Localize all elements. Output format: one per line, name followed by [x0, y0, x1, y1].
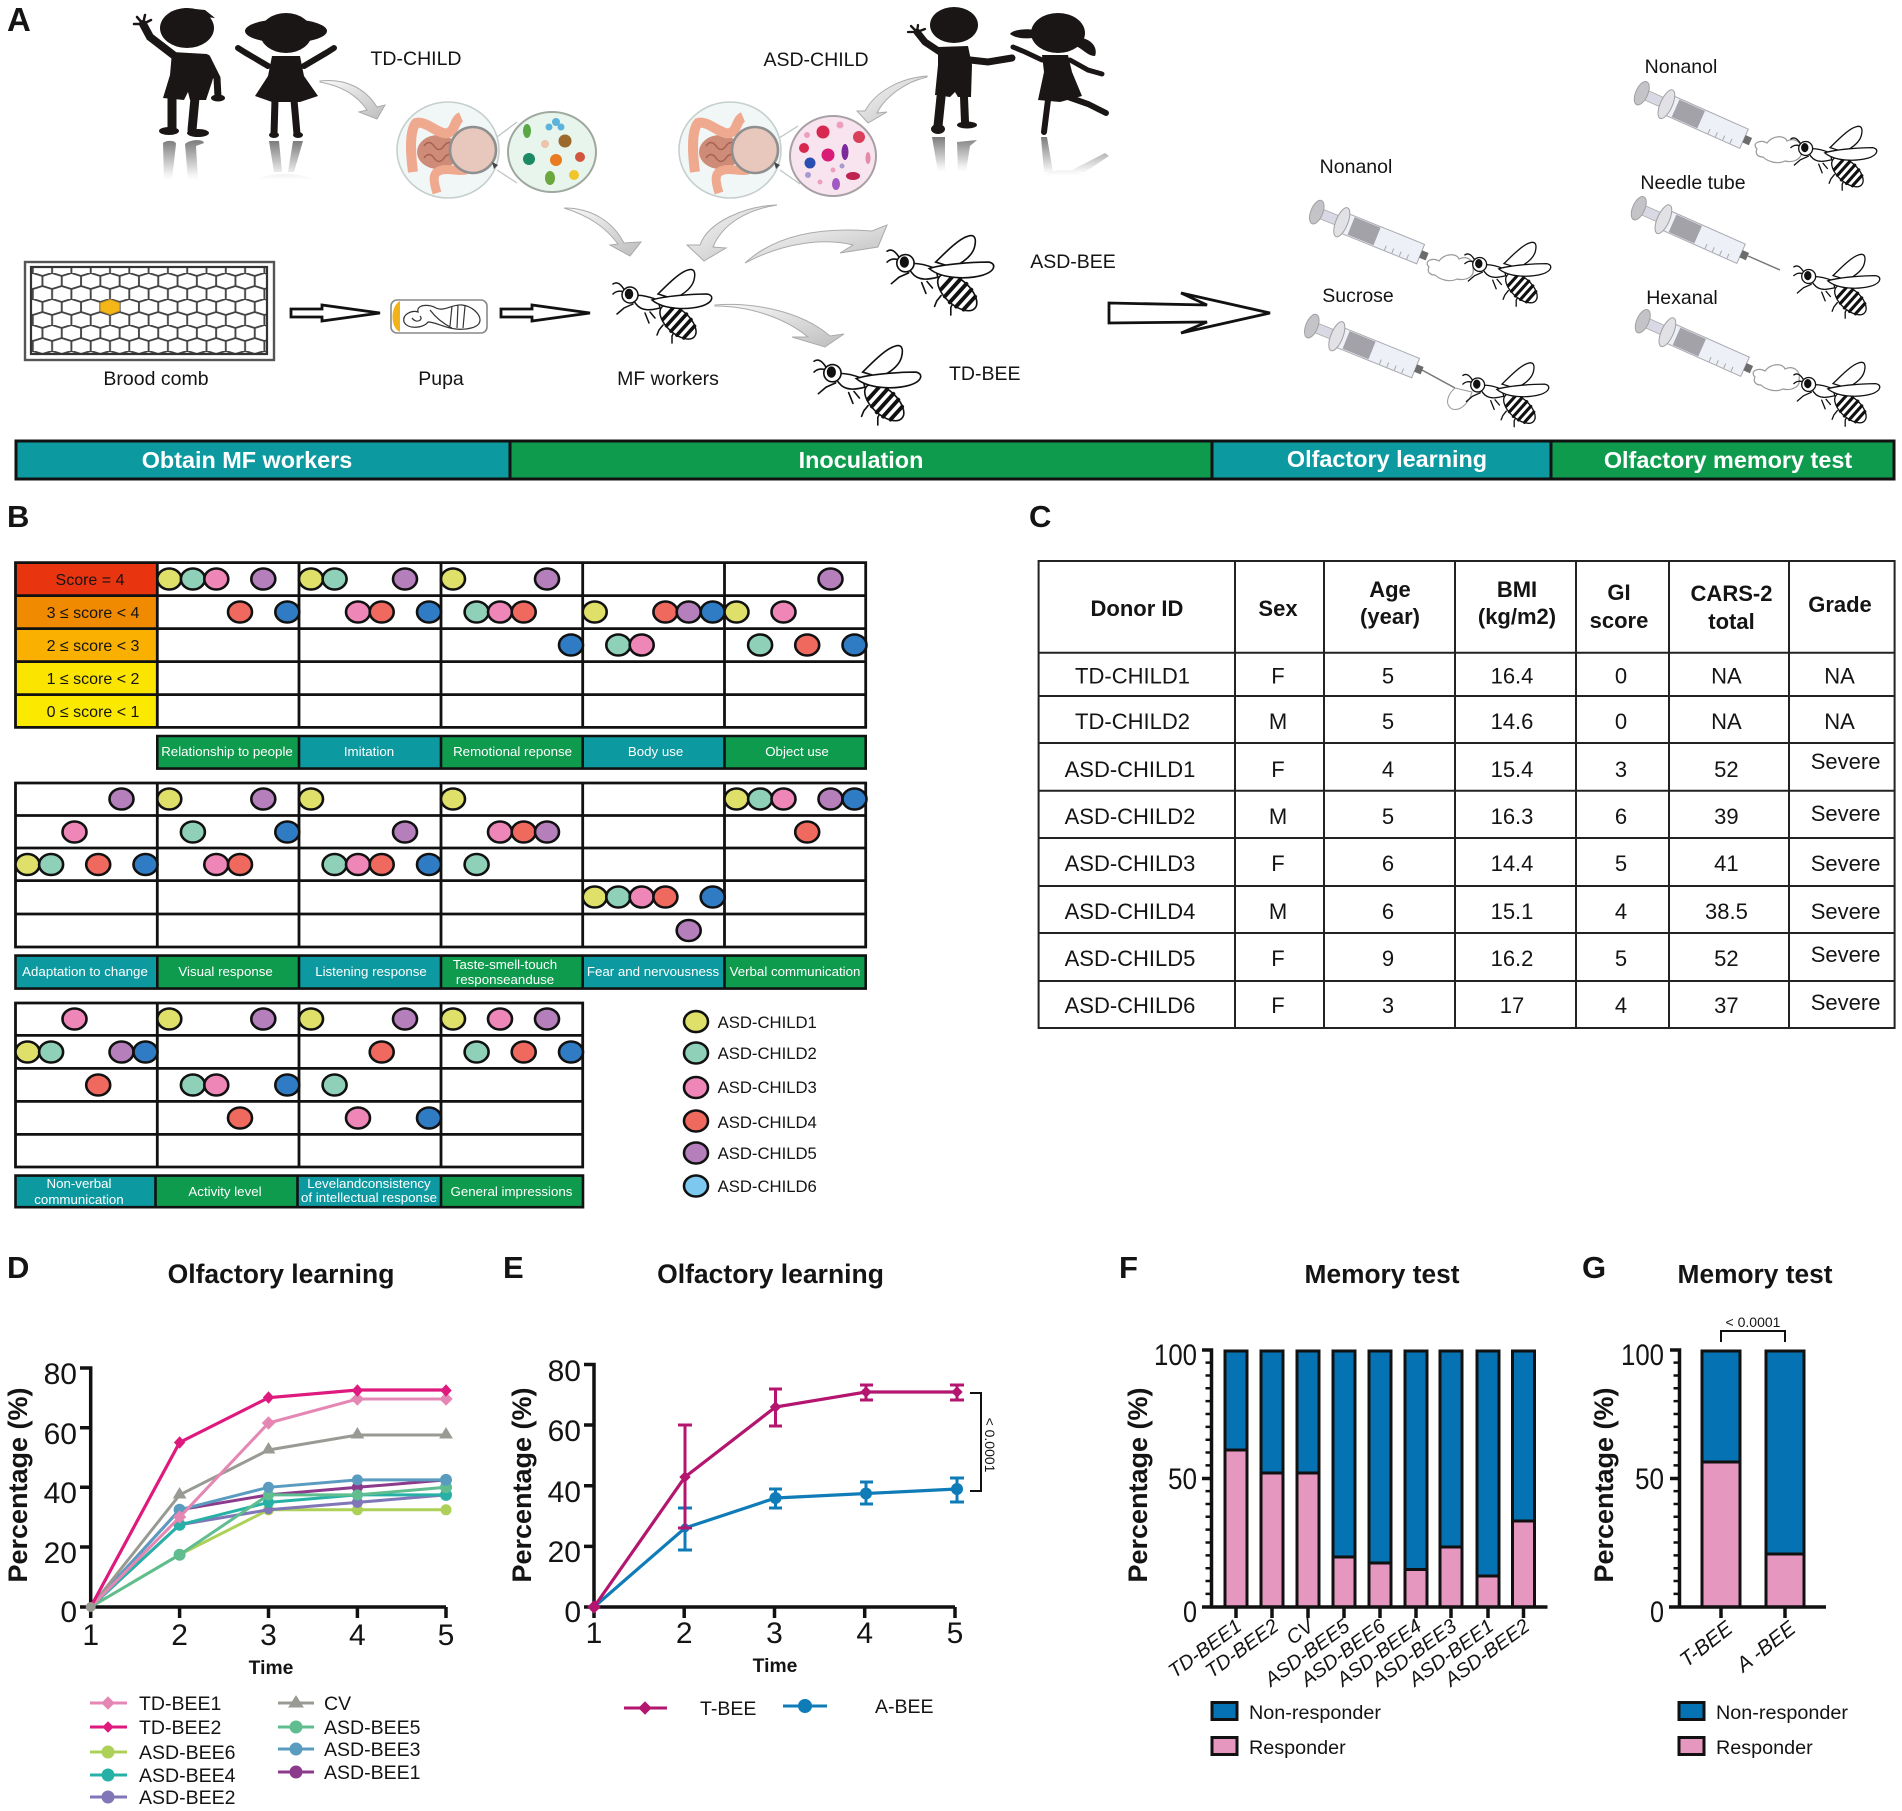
table header: BMI [1497, 577, 1537, 602]
grid 3 lines [16, 1003, 583, 1167]
grid 3 category labels: Levelandconsistency [307, 1176, 431, 1191]
table row ASD-CHILD3: 6 [1382, 851, 1394, 876]
syringe and bee: Nonanol test [1630, 77, 1877, 192]
arrow: inoculation to learning [1109, 293, 1270, 333]
series TD-BEE1 [91, 1393, 452, 1607]
table row ASD-CHILD1: Severe [1811, 749, 1880, 774]
grid 2 category labels: Verbal communication [730, 964, 860, 979]
legend: ASD-BEE6 [139, 1742, 235, 1764]
y tick labels [1621, 1339, 1664, 1629]
series ASD-BEE2 [91, 1490, 451, 1607]
legend [90, 1693, 421, 1809]
table row TD-CHILD1: NA [1824, 664, 1855, 688]
donor legend: ASD-CHILD4 [718, 1113, 817, 1132]
legend: ASD-BEE2 [139, 1787, 235, 1809]
table row ASD-CHILD4: 4 [1615, 899, 1627, 924]
panel letter F: F [1119, 1250, 1138, 1285]
axis tick labels: 4 [856, 1617, 873, 1650]
panel B: CARS score matrix [7, 499, 866, 1207]
donor legend: ASD-CHILD2 [718, 1044, 817, 1063]
legend: ASD-BEE4 [139, 1765, 236, 1787]
stage bar: Inoculation [799, 447, 923, 473]
grid 1 category labels: Object use [765, 744, 829, 759]
grid 2 lines [16, 783, 866, 947]
table row ASD-CHILD5: 9 [1382, 946, 1394, 971]
series ASD-BEE1 [91, 1480, 446, 1607]
grid 1 donor dots [157, 568, 867, 656]
table row ASD-CHILD5: F [1271, 946, 1285, 971]
table row TD-CHILD2: NA [1824, 709, 1855, 734]
table header: score [1590, 608, 1648, 633]
table header: (kg/m2) [1478, 604, 1556, 629]
series ASD-BEE5 [91, 1482, 451, 1607]
arrow: comb to pupa [291, 305, 380, 321]
donor legend: ASD-CHILD6 [718, 1177, 817, 1196]
table row TD-CHILD2: M [1269, 709, 1287, 734]
icon: TD girl silhouette [238, 13, 334, 180]
panel letter C: C [1029, 499, 1051, 534]
axis tick labels: 60 [548, 1415, 581, 1448]
grid 1 lines [16, 563, 866, 727]
grid 3 category labels: Non-verbal [46, 1176, 112, 1191]
legend [624, 1696, 934, 1720]
axis tick labels: 80 [548, 1355, 581, 1388]
table row ASD-CHILD1: 4 [1382, 757, 1394, 782]
panel letter E: E [503, 1250, 524, 1285]
axes and ticks [584, 1364, 955, 1618]
icon: TD bee [814, 346, 921, 427]
significance bracket: < 0.0001 [1726, 1314, 1781, 1330]
table row ASD-CHILD4 [1065, 899, 1880, 924]
origin marker [86, 1602, 96, 1612]
panel F: memory test stacked bars [1119, 1250, 1548, 1759]
axis tick labels: 40 [548, 1476, 581, 1509]
syringe and bee: Nonanol learning [1305, 196, 1551, 308]
table row ASD-CHILD1: 15.4 [1491, 757, 1533, 782]
series TD-BEE2 [91, 1385, 451, 1607]
axis tick labels: 80 [44, 1358, 77, 1391]
stacked bars [1225, 1351, 1534, 1607]
grid 3 donor dots [16, 1008, 583, 1128]
icon: brood comb [25, 262, 274, 360]
x tick labels: TD-BEE2 [1202, 1615, 1283, 1683]
legend: ASD-BEE3 [324, 1739, 420, 1761]
x tick labels: ASD-BEE6 [1296, 1615, 1391, 1692]
connector lines ASD [776, 126, 800, 184]
chart title: Olfactory learning [168, 1259, 394, 1289]
legend: A-BEE [875, 1696, 934, 1718]
table row ASD-CHILD4: Severe [1811, 899, 1880, 924]
label MF workers: MF workers [617, 368, 719, 390]
table row ASD-CHILD1: 52 [1714, 757, 1739, 782]
panel C: donor table [1029, 499, 1895, 1028]
label Brood comb: Brood comb [103, 368, 209, 390]
label ASD-BEE: ASD-BEE [1030, 251, 1116, 273]
icon: MF worker bee [613, 269, 712, 345]
stacked bars [1702, 1351, 1804, 1607]
panel G: pooled memory test [1582, 1250, 1848, 1759]
icon: ASD gut [679, 102, 781, 198]
table row ASD-CHILD4: 15.1 [1491, 899, 1533, 924]
grid 3 category labels: General impressions [451, 1184, 573, 1199]
grid 1 category labels: Body use [628, 744, 683, 759]
legend: TD-BEE2 [139, 1717, 221, 1739]
axes and ticks [1202, 1350, 1548, 1618]
score scale: Score = 4 [56, 572, 125, 589]
table row ASD-CHILD6: ASD-CHILD6 [1065, 993, 1195, 1018]
score scale: 0 ≤ score < 1 [47, 704, 140, 721]
icon: TD microbiota circle [508, 112, 596, 192]
icon: pupa tube [391, 300, 487, 333]
icon: TD gut [397, 102, 499, 198]
table grid [1039, 561, 1895, 1028]
y axis label: Percentage (%) [1123, 1387, 1153, 1583]
significance bracket: < 0.0001 [982, 1418, 998, 1473]
axis tick labels [548, 1355, 963, 1650]
table row ASD-CHILD2: 5 [1382, 804, 1394, 829]
table row ASD-CHILD5: Severe [1811, 942, 1880, 967]
grid 2 category labels: responseanduse [456, 972, 554, 987]
panel letter G: G [1582, 1250, 1606, 1285]
icon: ASD bee [887, 236, 994, 317]
table row TD-CHILD2: TD-CHILD2 [1075, 709, 1190, 734]
stage bar: Olfactory memory test [1604, 447, 1852, 473]
axis tick labels: 0 [60, 1596, 77, 1629]
arrow: ASD microbiota to MF workers [687, 205, 777, 261]
y axis label: Percentage (%) [1589, 1387, 1619, 1583]
donor legend: ASD-CHILD3 [718, 1078, 817, 1097]
panel A: experimental workflow [7, 1, 1894, 479]
table row ASD-CHILD2: 16.3 [1491, 804, 1533, 829]
legend [1679, 1702, 1848, 1759]
table row ASD-CHILD2: M [1269, 804, 1287, 829]
axis tick labels: 1 [82, 1619, 99, 1652]
table row ASD-CHILD4: 6 [1382, 899, 1394, 924]
y axis label: Percentage (%) [3, 1387, 33, 1583]
x axis title: Time [753, 1656, 798, 1677]
label Nonanol memory test: Nonanol [1645, 56, 1717, 78]
table row TD-CHILD2 [1075, 709, 1855, 734]
grid 2 category labels: Fear and nervousness [587, 964, 720, 979]
table row TD-CHILD2: 0 [1615, 709, 1627, 734]
grid 1 category labels: Relationship to people [161, 744, 293, 759]
table row ASD-CHILD6: 3 [1382, 993, 1394, 1018]
x tick labels: ASD-BEE2 [1440, 1615, 1534, 1692]
table row ASD-CHILD6: 17 [1500, 993, 1524, 1018]
axis tick labels: 20 [44, 1537, 77, 1570]
table row TD-CHILD1: 5 [1382, 664, 1394, 688]
grid 1 category labels [157, 736, 866, 769]
legend [1212, 1702, 1381, 1759]
y tick labels: 0 [1183, 1596, 1197, 1629]
stage bar: Obtain MF workers [142, 447, 352, 473]
axis tick labels [44, 1358, 454, 1652]
legend: CV [324, 1693, 351, 1715]
axis tick labels: 60 [44, 1418, 77, 1451]
axis tick labels: 5 [947, 1617, 963, 1650]
label Sucrose: Sucrose [1322, 285, 1394, 307]
table row TD-CHILD2: 5 [1382, 709, 1394, 734]
table row ASD-CHILD2: 6 [1615, 804, 1627, 829]
stage bar: Olfactory learning [1287, 446, 1487, 472]
table row TD-CHILD1: 16.4 [1491, 664, 1533, 688]
table header: total [1708, 609, 1755, 634]
series T-BEE with error bars [588, 1385, 964, 1613]
donor legend: ASD-CHILD5 [718, 1144, 817, 1163]
table row TD-CHILD1: 0 [1615, 664, 1627, 688]
icon: ASD microbiota circle [790, 116, 876, 196]
table row ASD-CHILD3 [1065, 851, 1880, 876]
series ASD-BEE4 [91, 1489, 451, 1607]
axis tick labels: 40 [44, 1477, 77, 1510]
table row ASD-CHILD6: Severe [1811, 990, 1880, 1015]
table row ASD-CHILD2: ASD-CHILD2 [1065, 804, 1195, 829]
syringe and bee: Hexanal test [1631, 305, 1880, 428]
table header: GI [1607, 580, 1631, 605]
grid 3 category labels: Activity level [188, 1184, 262, 1199]
connector lines TD [493, 122, 517, 183]
table header [1091, 577, 1872, 634]
x tick labels: CV [1283, 1614, 1319, 1649]
x tick labels: A -BEE [1731, 1616, 1801, 1678]
label Pupa: Pupa [418, 368, 464, 390]
grid 2 donor dots [16, 788, 866, 941]
chart title: Memory test [1305, 1259, 1460, 1289]
axis tick labels: 3 [260, 1619, 277, 1652]
grid 1 category labels: Remotional reponse [453, 744, 572, 759]
legend: T-BEE [700, 1698, 756, 1720]
table row ASD-CHILD5: 52 [1714, 946, 1739, 971]
grid 2 category labels: Adaptation to change [22, 964, 148, 979]
table row ASD-CHILD5: 5 [1615, 946, 1627, 971]
table row ASD-CHILD6: 4 [1615, 993, 1627, 1018]
label TD-BEE: TD-BEE [949, 363, 1021, 385]
axis tick labels: 2 [171, 1619, 188, 1652]
table header: Grade [1808, 592, 1872, 617]
grid 1 category labels: Imitation [344, 744, 394, 759]
significance bracket [1721, 1314, 1785, 1342]
axis tick labels: 1 [586, 1617, 602, 1650]
legend: Responder [1249, 1737, 1346, 1759]
grid 2 category labels: Taste-smell-touch [453, 957, 557, 972]
table row TD-CHILD1: TD-CHILD1 [1075, 664, 1190, 688]
icon: ASD girl silhouette [1010, 13, 1109, 176]
panel D: olfactory learning line chart [3, 1250, 454, 1809]
table row TD-CHILD1: NA [1711, 664, 1742, 688]
table header: CARS-2 [1691, 581, 1772, 606]
table row ASD-CHILD5 [1065, 942, 1880, 971]
table row ASD-CHILD1: F [1271, 757, 1285, 782]
table row ASD-CHILD5: ASD-CHILD5 [1065, 946, 1195, 971]
donor legend: ASD-CHILD1 [718, 1013, 817, 1032]
x tick labels [1165, 1614, 1534, 1692]
arrow: pupa to MF workers [501, 305, 590, 321]
legend: Non-responder [1716, 1702, 1848, 1724]
score scale [16, 563, 157, 728]
table row ASD-CHILD4: M [1269, 899, 1287, 924]
y tick labels: 50 [1635, 1463, 1664, 1496]
y tick labels: 0 [1650, 1596, 1664, 1629]
x tick labels [1676, 1616, 1801, 1678]
arrow: ASD child to gut [857, 76, 927, 123]
panel E: pooled olfactory learning [503, 1250, 998, 1720]
x axis title: Time [249, 1658, 294, 1679]
label ASD-CHILD: ASD-CHILD [763, 49, 869, 71]
legend: ASD-BEE1 [324, 1762, 420, 1784]
x tick labels: ASD-BEE1 [1404, 1615, 1498, 1692]
grid 3 category labels: communication [34, 1192, 124, 1207]
score scale: 1 ≤ score < 2 [47, 671, 140, 688]
chart title: Memory test [1678, 1259, 1833, 1289]
table row ASD-CHILD2: 39 [1714, 804, 1739, 829]
arrow: MF workers to ASD-BEE [745, 225, 887, 263]
y tick labels: 100 [1621, 1339, 1664, 1372]
table row TD-CHILD1 [1075, 664, 1855, 688]
table header: (year) [1360, 604, 1420, 629]
legend: Responder [1716, 1737, 1813, 1759]
table header: Donor ID [1091, 596, 1183, 621]
label Nonanol learning: Nonanol [1320, 156, 1392, 178]
grid 3 category labels: of intellectual response [301, 1190, 437, 1205]
syringe and bee: Sucrose learning [1300, 310, 1549, 429]
table row ASD-CHILD3: 14.4 [1491, 851, 1533, 876]
table row ASD-CHILD3: Severe [1811, 851, 1880, 876]
chart title: Olfactory learning [657, 1259, 884, 1289]
x tick labels: T-BEE [1676, 1616, 1738, 1672]
series CV [91, 1428, 452, 1607]
grid 2 category labels [16, 956, 866, 989]
y tick labels: 100 [1154, 1339, 1197, 1372]
series A-BEE with error bars [594, 1478, 964, 1607]
axis tick labels: 3 [766, 1617, 783, 1650]
table row ASD-CHILD3: ASD-CHILD3 [1065, 851, 1195, 876]
grid 2 category labels: Listening response [315, 964, 427, 979]
legend: ASD-BEE5 [324, 1717, 421, 1739]
series ASD-BEE3 [91, 1474, 451, 1607]
axes and ticks [80, 1368, 446, 1618]
table row ASD-CHILD6 [1065, 990, 1880, 1018]
legend: TD-BEE1 [139, 1693, 221, 1715]
score scale: 2 ≤ score < 3 [47, 638, 140, 655]
grid 2 category labels: Visual response [178, 964, 273, 979]
series ASD-BEE6 [91, 1505, 451, 1607]
x tick labels: ASD-BEE4 [1332, 1615, 1426, 1692]
axis tick labels: 0 [564, 1596, 581, 1629]
stage bar [16, 441, 1894, 479]
label Needle tube: Needle tube [1640, 172, 1746, 194]
axes and ticks [1669, 1350, 1826, 1618]
table row ASD-CHILD4: ASD-CHILD4 [1065, 899, 1195, 924]
axis tick labels: 5 [438, 1619, 454, 1652]
arrow: TD microbiota to MF workers [564, 208, 641, 256]
x tick labels: TD-BEE1 [1165, 1615, 1246, 1683]
icon: ASD boy silhouette [908, 7, 1012, 172]
panel letter A: A [7, 1, 31, 38]
x tick labels: ASD-BEE5 [1260, 1615, 1355, 1692]
table row ASD-CHILD5: 16.2 [1491, 946, 1533, 971]
grid 3 category labels [16, 1176, 583, 1207]
donor legend [684, 1011, 817, 1196]
panel letter B: B [7, 499, 29, 534]
arrow: TD child to gut [320, 80, 385, 119]
table row ASD-CHILD2: Severe [1811, 801, 1880, 826]
panel letter D: D [7, 1250, 29, 1285]
axis tick labels: 2 [676, 1617, 693, 1650]
table row ASD-CHILD3: 5 [1615, 851, 1627, 876]
table row ASD-CHILD3: 41 [1714, 851, 1739, 876]
significance bracket [970, 1393, 998, 1491]
x tick labels: ASD-BEE3 [1367, 1615, 1461, 1692]
legend: Non-responder [1249, 1702, 1381, 1724]
table header: Age [1369, 577, 1411, 602]
table row ASD-CHILD6: F [1271, 993, 1285, 1018]
axis tick labels: 4 [349, 1619, 366, 1652]
axis tick labels: 20 [548, 1536, 581, 1569]
score scale: 3 ≤ score < 4 [47, 605, 140, 622]
table row TD-CHILD2: 14.6 [1491, 709, 1533, 734]
label TD-CHILD: TD-CHILD [370, 48, 462, 70]
label Hexanal: Hexanal [1646, 287, 1718, 309]
table header: Sex [1258, 596, 1298, 621]
table row TD-CHILD2: NA [1711, 709, 1742, 734]
table row TD-CHILD1: F [1271, 664, 1285, 688]
y axis label: Percentage (%) [507, 1387, 537, 1583]
table row ASD-CHILD3: F [1271, 851, 1285, 876]
y tick labels [1154, 1339, 1197, 1629]
y tick labels: 50 [1168, 1463, 1197, 1496]
table row ASD-CHILD4: 38.5 [1705, 899, 1748, 924]
icon: TD boy silhouette [134, 8, 225, 180]
table row ASD-CHILD2 [1065, 801, 1880, 829]
syringe and bee: Needle tube test [1627, 192, 1880, 320]
table row ASD-CHILD1: 3 [1615, 757, 1627, 782]
table row ASD-CHILD6: 37 [1714, 993, 1739, 1018]
table row ASD-CHILD1 [1065, 749, 1880, 782]
arrow: MF workers to TD-BEE [715, 304, 844, 347]
table row ASD-CHILD1: ASD-CHILD1 [1065, 757, 1195, 782]
